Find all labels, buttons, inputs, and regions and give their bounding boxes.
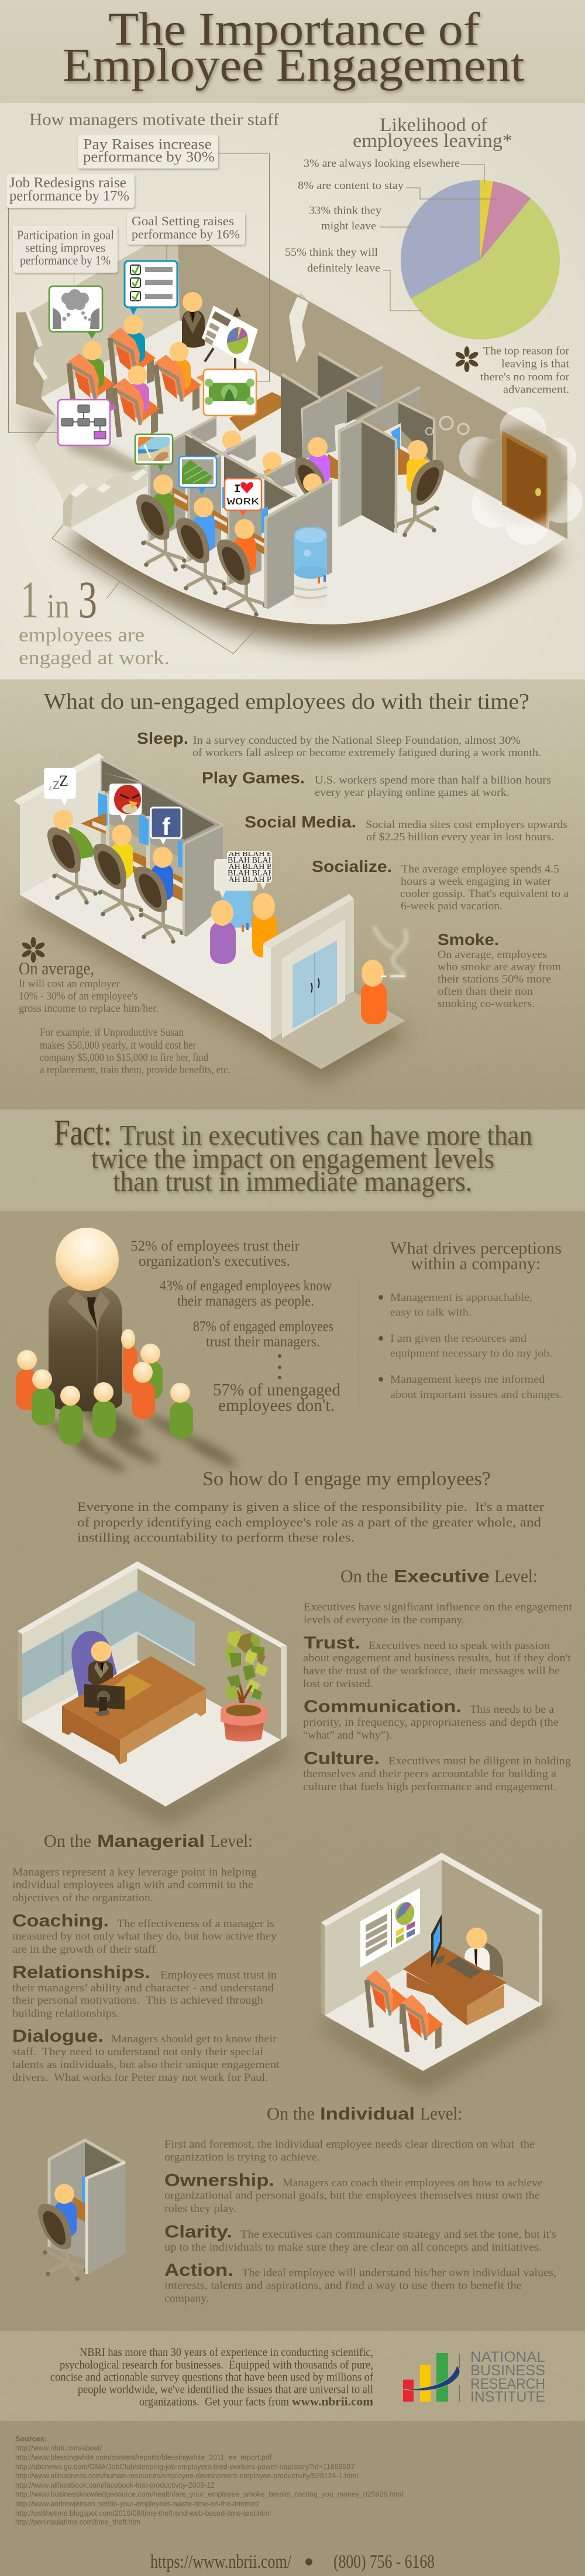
wall poster xyxy=(360,1888,420,1967)
intro paragraph: instilling accountability to perform these roles. xyxy=(77,1530,355,1545)
broken wall end xyxy=(16,312,58,417)
intro paragraph: Everyone in the company is given a slice of the responsibility pie. It's a matter xyxy=(77,1499,545,1514)
text: sleep: In a survey conducted by the National Sleep Foundation, almost 30% xyxy=(193,734,521,747)
level: managerial: Employees must trust in xyxy=(160,1969,277,1981)
text: sleep xyxy=(137,729,541,759)
text: sleep: of workers fall asleep or become extremely fatigued during a work month. xyxy=(192,747,541,759)
level: individual: Ownership. xyxy=(164,2171,274,2190)
heading: likelihood of leaving xyxy=(353,115,512,152)
desk xyxy=(62,1656,206,1764)
computer xyxy=(431,1914,481,1979)
divider xyxy=(358,1277,359,1406)
level: individual: Managers can coach their employees on how to achieve xyxy=(283,2177,543,2189)
level: executive: Executive xyxy=(394,1567,490,1586)
note: cost of replacing an employee: makes $50,000 yearly, it would cost her xyxy=(40,1039,197,1052)
logo: National Business Research Institute: NATIONAL xyxy=(470,2349,545,2365)
bubble: sleeping zzz: Z xyxy=(53,779,60,792)
callout: pay raises: Pay Raises increase xyxy=(83,137,212,152)
employee pegs xyxy=(16,1329,193,1445)
level: managerial: objectives of the organization. xyxy=(12,1892,153,1904)
intro paragraph: of properly identifying each employee's role as a part of the greater whole, and xyxy=(77,1514,541,1530)
callout: participation: Participation in goal xyxy=(17,228,114,242)
room shadow xyxy=(325,2004,553,2089)
asterisk icon xyxy=(455,346,479,372)
trust statistics: trust their managers. xyxy=(206,1334,320,1349)
sources list: http://www.nbrii.com/about/ xyxy=(15,2444,102,2452)
sources list: http://abcnews.go.com/GMA/JobClub/sleeping-job-employers-tired-workers-power-nap/story?id=11659597 xyxy=(15,2462,355,2471)
level: individual: The executives can communicate strategy and set the tone, but it's xyxy=(240,2228,556,2241)
text: social media: Social Media. xyxy=(245,813,356,831)
note: top reason for leaving: there's no room for xyxy=(480,371,570,383)
panel: what drives perceptions: within a company: xyxy=(411,1254,541,1273)
trust statistics: 43% of engaged employees know xyxy=(160,1278,332,1294)
footer contact: https://www.nbrii.com/ xyxy=(150,2551,292,2572)
title xyxy=(62,4,524,91)
fact banner xyxy=(54,1113,532,1197)
water cooler xyxy=(294,527,327,609)
level: individual: roles they play. xyxy=(164,2203,236,2215)
text: social media: of $2.25 billion every year in lost hours. xyxy=(366,831,554,843)
bubble: beach xyxy=(135,434,173,472)
bubble: second gossip xyxy=(214,859,257,898)
bubble: job redesign org chart xyxy=(58,400,117,445)
text: sleep: Sleep. xyxy=(137,729,188,747)
panel: about NBRI: www.nbrii.com xyxy=(292,2396,373,2409)
stat: 1 in 3: employees are xyxy=(19,624,144,646)
title: Employee Engagement xyxy=(62,40,524,91)
footer contact: (800) 756 - 6168 xyxy=(333,2551,435,2572)
bubble: blah blah: LAH BLAH BLAH xyxy=(223,850,289,858)
purple employee xyxy=(308,437,340,485)
left wall xyxy=(22,1568,137,1722)
logo: National Business Research Institute: BUSINESS xyxy=(470,2362,545,2379)
callout: job redesigns: performance by 17% xyxy=(9,188,129,204)
level: managerial: staff. They need to understand not only their special xyxy=(12,2046,263,2058)
text: socialize: cooler gossip. That's equivalent to a xyxy=(400,888,569,900)
level: managerial: talents as individuals, but also their unique engagement xyxy=(12,2059,280,2071)
green employee xyxy=(136,475,187,572)
level: managerial: measured by not only what they do, but how active they xyxy=(12,1930,277,1943)
floor xyxy=(325,1948,542,2071)
floor xyxy=(41,320,565,624)
callout: participation: performance by 1% xyxy=(20,253,111,267)
level: managerial: On the xyxy=(44,1830,91,1851)
pie labels: might leave xyxy=(321,220,376,232)
flip chart xyxy=(202,305,258,369)
end panel xyxy=(183,826,223,937)
pie chart xyxy=(401,180,560,339)
level: individual: organizational and personal goals, but the employees themselves must own the xyxy=(164,2190,540,2201)
level: managerial: Managerial xyxy=(97,1832,205,1851)
gossiping workers xyxy=(210,893,277,964)
trust statistics: organization's executives. xyxy=(139,1253,290,1269)
level: executive xyxy=(303,1566,573,1793)
smoker xyxy=(361,928,406,1024)
level: executive: priority, in frequency, appropriateness and depth (the xyxy=(303,1716,559,1729)
fact banner: twice the impact on engagement levels xyxy=(91,1142,494,1174)
level: managerial: individual employees align with and commit to the xyxy=(12,1878,253,1891)
panel: about NBRI: people worldwide, we've identified the issues that are universal to all xyxy=(78,2383,373,2396)
panel: what drives perceptions: What drives perceptions xyxy=(390,1238,562,1258)
fact banner: Trust in executives can have more than xyxy=(120,1119,532,1151)
text: socialize: hours a week engaging in water xyxy=(401,875,552,888)
text: play games: every year playing online games at work. xyxy=(315,786,510,799)
lower cubicle row xyxy=(136,417,332,617)
level: executive: On the xyxy=(340,1566,388,1586)
note: cost of replacing an employee xyxy=(19,958,230,1076)
level: managerial: drivers. What works for Peter may not work for Paul. xyxy=(12,2072,268,2084)
text: smoke xyxy=(438,930,561,1010)
level: executive: culture that fuels high performance and engagement. xyxy=(303,1781,556,1793)
level: executive: “what” and “why”). xyxy=(303,1729,392,1742)
panel: what drives perceptions: equipment necessary to do my job. xyxy=(390,1347,552,1360)
stat: 1 in 3 xyxy=(19,571,170,669)
note: top reason for leaving: leaving is that xyxy=(501,358,570,370)
heading: what do un-engaged employees do: What do un-engaged employees do with their time? xyxy=(44,689,529,714)
sources list: http://www.allfacebook.com/facebook-lost-productivity-2009-12 xyxy=(15,2481,215,2489)
level: managerial: Managers represent a key leverage point in helping xyxy=(12,1866,257,1878)
floor shadow xyxy=(64,497,565,644)
right wall xyxy=(442,1859,542,2004)
potted plant xyxy=(221,1630,268,1742)
level: individual: company. xyxy=(164,2293,209,2304)
panel: about NBRI xyxy=(50,2346,373,2409)
door wall xyxy=(263,895,354,1040)
level: individual xyxy=(164,2103,556,2304)
text: smoke: smoking co-workers. xyxy=(438,998,535,1010)
conference room shadow xyxy=(18,410,149,503)
top band xyxy=(18,1561,287,1648)
sources list xyxy=(15,2435,403,2526)
note: cost of replacing an employee: gross income to replace him/her. xyxy=(19,1002,159,1015)
thought cloud xyxy=(425,407,583,545)
title: The Importance of xyxy=(108,4,480,55)
level: managerial: their personal motivations. This is achieved through xyxy=(12,1994,264,2007)
level: executive: themselves and their peers accountable for building a xyxy=(303,1768,557,1780)
callout: participation xyxy=(13,226,118,273)
callout: participation: setting improves xyxy=(25,240,105,255)
illustration: individual cubicle xyxy=(38,2140,126,2281)
water cooler xyxy=(222,885,251,950)
seated audience xyxy=(68,315,201,437)
pie labels: 55% think they will xyxy=(285,246,378,259)
level: managerial: Coaching. xyxy=(12,1911,109,1931)
callout: pay raises xyxy=(78,135,218,169)
trust statistics: employees don't. xyxy=(218,1396,335,1415)
bubble: brainstorm xyxy=(49,286,102,339)
level: managerial: are in the growth of their staff. xyxy=(12,1943,159,1956)
bubble: blah blah xyxy=(227,851,272,889)
text: socialize: The average employee spends 4.5 xyxy=(401,863,559,875)
note: cost of replacing an employee: It will cost an employer xyxy=(19,978,121,990)
outer wall xyxy=(20,756,101,895)
broken partition xyxy=(289,297,308,363)
panel: about NBRI: concise and actionable survey questions that have been used by millions of xyxy=(50,2371,373,2384)
intro paragraph xyxy=(77,1499,545,1545)
level: managerial: building relationships. xyxy=(12,2007,119,2020)
back panels xyxy=(101,758,222,878)
door xyxy=(502,431,548,529)
callout: goal setting: Goal Setting raises xyxy=(132,214,234,228)
sources list: Sources: xyxy=(15,2435,47,2443)
level: individual: First and foremost, the individual employee needs clear direction on what the xyxy=(164,2138,535,2151)
level: executive: Level: xyxy=(494,1566,538,1586)
level: executive: Trust. xyxy=(304,1633,360,1653)
manager xyxy=(464,1928,503,1977)
note: top reason for leaving: The top reason for xyxy=(483,345,570,357)
callout: pay raises: performance by 30% xyxy=(83,149,215,165)
text: play games: Play Games. xyxy=(202,769,305,786)
heading: likelihood of leaving: Likelihood of xyxy=(380,115,487,136)
panel: what drives perceptions: I am given the resources and xyxy=(390,1332,527,1345)
bubble: video game xyxy=(179,456,216,494)
heading: how managers motivate: How managers motivate their staff xyxy=(29,110,279,129)
top band xyxy=(321,1853,542,1927)
bubble: sleeping zzz: Z xyxy=(59,772,68,789)
level: individual: interests, talents and aspirations, and find a way to use them to benefit the xyxy=(164,2280,522,2292)
green worker asleep xyxy=(47,810,98,905)
front panel xyxy=(264,480,332,609)
yellow employee xyxy=(394,440,444,537)
right back wall xyxy=(178,227,567,539)
floor xyxy=(20,849,271,1040)
level: individual: On the xyxy=(267,2103,315,2124)
bubble: blah blah: BLAH BLAH BLAH xyxy=(228,869,298,878)
level: individual: up to the individuals to make sure they are clear on all concepts and initiatives. xyxy=(164,2241,542,2254)
trust statistics: 57% of unengaged xyxy=(213,1380,340,1400)
note: cost of replacing an employee: 10% - 30% of an employee's xyxy=(19,990,137,1002)
pie labels: 3% are always looking elsewhere xyxy=(304,157,460,170)
stat: 1 in 3: in xyxy=(47,587,70,625)
central partition xyxy=(339,422,362,527)
panel: what drives perceptions: Management is approachable, xyxy=(390,1292,532,1304)
note: top reason for leaving xyxy=(480,345,570,396)
level: executive: have the trust of the workforce, their messages will be xyxy=(303,1665,560,1677)
text: smoke: On average, employees xyxy=(438,949,547,961)
presenter xyxy=(182,292,205,348)
bubble: goal checklist xyxy=(125,261,177,315)
heading: so how do I engage: So how do I engage my employees? xyxy=(202,1468,491,1490)
panel: what drives perceptions: easy to talk with. xyxy=(390,1306,472,1319)
callout: job redesigns: Job Redesigns raise xyxy=(9,175,126,191)
bubble: sleeping zzz: z xyxy=(49,783,53,792)
bubble: facebook: f xyxy=(162,813,171,840)
footer contact xyxy=(150,2551,435,2572)
platform outside xyxy=(271,992,405,1069)
text: socialize: 6-week paid vacation. xyxy=(401,900,503,912)
note: cost of replacing an employee: On average, xyxy=(19,958,94,978)
level: managerial: Level: xyxy=(210,1830,253,1851)
text: social media xyxy=(245,813,567,843)
floor xyxy=(22,1660,281,1806)
level: executive: levels of everyone in the company. xyxy=(304,1614,464,1626)
callout: goal setting: performance by 16% xyxy=(132,227,240,241)
top wall band xyxy=(178,222,524,417)
level: managerial: Relationships. xyxy=(12,1963,150,1982)
connector lines xyxy=(8,153,269,654)
text: socialize: Socialize. xyxy=(312,857,392,875)
bubble: pay raise money xyxy=(196,369,256,415)
level: executive: lost or twisted. xyxy=(303,1678,373,1690)
bubble: I love work: I xyxy=(234,483,240,496)
level: executive: This needs to be a xyxy=(470,1703,555,1716)
level: individual: Level: xyxy=(420,2103,462,2124)
bubble: blah blah: LAH BLAH BLAH xyxy=(223,875,289,884)
text: social media: Social media sites cost employers upwards xyxy=(366,819,567,831)
logo: National Business Research Institute: INSTITUTE xyxy=(470,2389,545,2405)
level: individual: The ideal employee will understand his/her own individual values, xyxy=(242,2267,556,2279)
level: individual: Action. xyxy=(164,2261,233,2280)
stat: 1 in 3: 1 xyxy=(20,571,39,629)
trust statistics: 52% of employees trust their xyxy=(130,1238,300,1254)
text: smoke: Smoke. xyxy=(438,930,499,949)
hallway shadow xyxy=(20,901,410,1083)
illustration: un-engaged office hallway xyxy=(14,753,410,1083)
panel: about NBRI: organizations. Get your facts from xyxy=(139,2396,289,2409)
note: top reason for leaving: advancement. xyxy=(503,384,569,396)
note: cost of replacing an employee: a replacement, train them, provide benefits, etc. xyxy=(40,1064,230,1076)
bubble: facebook xyxy=(151,808,181,844)
text: smoke: their stations 50% more xyxy=(438,973,551,985)
level: individual: organization is trying to achieve. xyxy=(164,2151,320,2163)
room shadow xyxy=(22,1723,292,1823)
logo: National Business Research Institute: RESEARCH xyxy=(470,2376,545,2392)
pie labels: 33% think they xyxy=(309,205,382,217)
sources list: http://www.allbusiness.com/human-resources/employee-development-employee-productivity/528124-1.html xyxy=(15,2472,358,2480)
right wall xyxy=(137,1568,281,1740)
callout: job redesigns xyxy=(6,174,135,208)
yellow worker gaming xyxy=(93,825,143,921)
sources list: http://callthetime.blogspot.com/2010/09/time-theft-and-web-based-time-and.html xyxy=(15,2509,271,2517)
left back wall xyxy=(29,227,180,398)
pie labels: 8% are content to stay xyxy=(298,180,404,192)
note: cost of replacing an employee: company $5,000 to $15,000 to fire her, find xyxy=(40,1052,208,1064)
illustration: executive office xyxy=(18,1561,292,1823)
bubble: blah blah: BLAH BLAH BLAH xyxy=(228,856,298,865)
stat: 1 in 3: engaged at work. xyxy=(19,647,170,669)
monitors xyxy=(335,423,345,452)
panel: about NBRI: NBRI has more than 30 years of experience in conducting scientific, xyxy=(80,2346,373,2359)
bubble: sleeping zzz xyxy=(44,768,76,806)
gap between floor pieces xyxy=(35,417,149,503)
bubble: blah blah: LAH BLAH BLAH xyxy=(223,863,289,871)
text: socialize xyxy=(312,857,569,912)
level: managerial: Managers should get to know their xyxy=(111,2033,277,2045)
panel: what drives perceptions: Management keeps me informed xyxy=(390,1373,545,1386)
illustration: office floor plan xyxy=(8,153,585,654)
text: play games: U.S. workers spend more than half a billion hours xyxy=(315,774,551,786)
fact banner: than trust in immediate managers. xyxy=(113,1165,472,1197)
sources list: http://www.andrewjensen.net/do-your-employees-waste-time-on-the-internet/ xyxy=(15,2500,260,2508)
broken wall lower block xyxy=(63,468,147,528)
level: individual: Clarity. xyxy=(164,2223,232,2241)
blue employee xyxy=(176,497,226,595)
trust statistics xyxy=(130,1238,340,1415)
callout: goal setting xyxy=(127,212,245,245)
stat: 1 in 3: 3 xyxy=(78,571,97,629)
bubble: I love work: WORK xyxy=(227,497,260,508)
level: executive: Executives must be diligent in holding xyxy=(388,1755,572,1767)
note: cost of replacing an employee: For example, if Unproductive Susan xyxy=(40,1026,184,1039)
trust statistics: 87% of engaged employees xyxy=(193,1319,333,1334)
sources list: http://peninsulatime.com/time_theft.htm xyxy=(15,2518,140,2526)
bench xyxy=(229,392,281,431)
level: executive: Executives have significant influence on the engagement xyxy=(304,1601,573,1613)
pie labels: definitely leave xyxy=(307,262,380,274)
bubble: angry bird game xyxy=(109,784,142,822)
blue worker on social media xyxy=(134,847,184,944)
illustration: manager office xyxy=(321,1853,553,2089)
panel: what drives perceptions xyxy=(378,1238,563,1401)
level: individual: Individual xyxy=(320,2104,415,2124)
text: smoke: who smoke are away from xyxy=(438,961,561,973)
left wall xyxy=(325,1859,442,2015)
executive in chair xyxy=(71,1631,117,1700)
logo: National Business Research Institute xyxy=(403,2349,545,2405)
heading: likelihood of leaving: employees leaving* xyxy=(353,130,512,152)
text: smoke: often than their non xyxy=(438,985,534,998)
sources list: http://www.businessknowledgesource.com/health/are_your_employee_smoke_breaks_costing_you_money_025926.html xyxy=(15,2491,403,2499)
asterisk icon xyxy=(21,937,46,963)
panel: about NBRI: psychological research for businesses. Equipped with thousands of pure, xyxy=(60,2358,373,2371)
upper cubicles xyxy=(281,353,444,537)
level: managerial: their managers’ ability and character - and understand xyxy=(12,1982,274,1994)
level: managerial: Dialogue. xyxy=(12,2027,104,2046)
text: play games xyxy=(202,769,551,799)
level: managerial: The effectiveness of a manager is xyxy=(117,1918,274,1930)
trust statistics: their managers as people. xyxy=(177,1293,314,1309)
pie labels xyxy=(285,157,497,311)
level: executive: Executives need to speak with passion xyxy=(369,1640,550,1652)
manager desk xyxy=(403,1945,507,2025)
orange employee xyxy=(217,519,267,617)
monitor xyxy=(84,1684,125,1716)
sources list: http://www.blessingwhite.com/content/reports/blessingwhite_2011_ee_report.pdf xyxy=(15,2453,272,2461)
panel: what drives perceptions: about important issues and changes. xyxy=(390,1389,563,1401)
bubble: I love work xyxy=(225,479,261,517)
illustration: executive with employees xyxy=(16,1228,239,1476)
level: executive: about engagement and business results, but if they don't xyxy=(303,1652,572,1664)
level: managerial xyxy=(12,1830,280,2084)
visitor chairs xyxy=(366,1970,443,2052)
level: executive: Culture. xyxy=(304,1749,380,1768)
level: executive: Communication. xyxy=(304,1697,462,1716)
fact banner: Fact: xyxy=(54,1113,111,1153)
